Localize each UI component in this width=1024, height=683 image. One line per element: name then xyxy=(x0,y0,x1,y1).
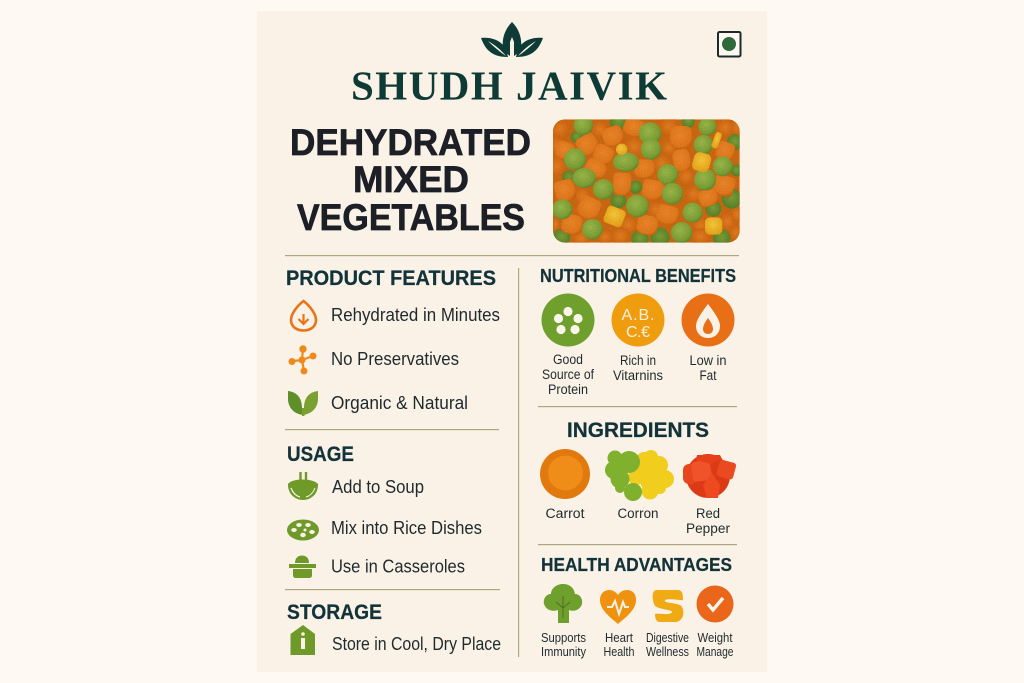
column divider xyxy=(518,268,519,657)
divider xyxy=(285,429,499,430)
icon: heart with pulse xyxy=(600,590,636,624)
text: rich in vitarnins xyxy=(613,353,663,383)
title: MIXED xyxy=(353,159,469,200)
heading: ingredients: INGREDIENTS xyxy=(567,419,709,442)
icon: sprout leaves xyxy=(288,391,318,416)
text: heart health: Heart xyxy=(605,631,633,645)
text: weight manage: Weight xyxy=(698,631,733,645)
text: supports immunity: Immunity xyxy=(541,645,587,659)
text: red pepper xyxy=(686,506,730,536)
text: low in fat: Fat xyxy=(700,368,717,383)
text: use in casseroles: Use in Casseroles xyxy=(331,556,465,576)
text: add to soup: Add to Soup xyxy=(332,477,424,497)
text: heart health xyxy=(604,631,635,659)
text: heart health: Health xyxy=(604,645,635,659)
text: carrot: Carrot xyxy=(546,506,585,521)
brand name: SHUDH JAIVIK xyxy=(351,62,667,108)
text: rich in vitarnins: Vitarnins xyxy=(613,368,663,383)
icon: low fat drop circle xyxy=(682,294,734,346)
heading: usage: USAGE xyxy=(287,443,354,466)
text: digestive wellness: Wellness xyxy=(646,645,689,659)
icon: vitamins circle xyxy=(612,294,664,346)
product label panel xyxy=(257,11,767,672)
text: red pepper: Red xyxy=(696,506,720,521)
icon: carrot slice xyxy=(540,449,590,499)
text: red pepper: Pepper xyxy=(686,521,730,536)
text: good source of protein: Source of xyxy=(542,367,594,382)
text: rich in vitarnins: Rich in xyxy=(620,353,656,368)
heading: health advantages: HEALTH ADVANTAGES xyxy=(541,555,732,575)
text: corron: Corron xyxy=(618,506,658,521)
icon: digestive s shape xyxy=(653,590,683,622)
panel: health advantages xyxy=(541,555,734,659)
text: weight manage: Manage xyxy=(696,645,734,659)
icon: rice dish xyxy=(287,520,319,540)
heading: product features: PRODUCT FEATURES xyxy=(286,267,496,290)
divider xyxy=(538,406,737,407)
text: no preservatives: No Preservatives xyxy=(331,349,459,369)
title: VEGETABLES xyxy=(297,197,525,238)
text: low in fat xyxy=(690,353,726,383)
text: supports immunity xyxy=(541,631,587,659)
icon: vitamins circle: A.B. xyxy=(622,307,654,324)
icon: vitamins circle: C.€ xyxy=(626,324,650,341)
panel: product features xyxy=(286,267,500,416)
heading: storage: STORAGE xyxy=(287,601,382,624)
logo: three leaves xyxy=(481,22,543,57)
text: rehydrated in minutes: Rehydrated in Minutes xyxy=(331,305,500,325)
icon: soup bowl xyxy=(288,472,318,500)
icon: water drop with arrow xyxy=(291,301,316,330)
title: DEHYDRATED xyxy=(290,122,531,163)
divider xyxy=(285,589,500,590)
icon: molecule xyxy=(289,346,316,374)
icon: casserole xyxy=(289,556,316,578)
text: supports immunity: Supports xyxy=(541,631,586,645)
title xyxy=(290,122,531,238)
icon: broccoli xyxy=(544,584,582,623)
icon: storage house xyxy=(290,625,315,655)
text: organic and natural: Organic & Natural xyxy=(331,393,468,413)
text: good source of protein xyxy=(542,352,594,397)
icon: peas and corn xyxy=(605,450,674,501)
icon: check circle xyxy=(696,586,734,622)
panel: storage xyxy=(287,601,501,655)
text: low in fat: Low in xyxy=(690,353,726,368)
text: weight manage xyxy=(696,631,734,659)
heading: nutritional benefits: NUTRITIONAL BENEFITS xyxy=(540,266,736,286)
icon: red pepper pieces xyxy=(683,454,737,498)
divider under header xyxy=(285,255,739,256)
text: digestive wellness: Digestive xyxy=(646,631,689,645)
vegetarian mark xyxy=(718,32,740,56)
text: mix into rice dishes: Mix into Rice Dishes xyxy=(331,518,482,538)
text: good source of protein: Protein xyxy=(548,382,588,397)
panel: nutritional benefits xyxy=(540,266,736,397)
icon: protein circle xyxy=(542,294,594,346)
panel: ingredients xyxy=(540,419,737,536)
text: good source of protein: Good xyxy=(553,352,583,367)
panel: usage xyxy=(287,443,482,578)
text: digestive wellness xyxy=(646,631,689,659)
text: store in cool dry place: Store in Cool, Dry Place xyxy=(332,634,501,654)
divider xyxy=(538,544,737,545)
product photo: mixed dehydrated vegetable pieces xyxy=(553,119,740,243)
